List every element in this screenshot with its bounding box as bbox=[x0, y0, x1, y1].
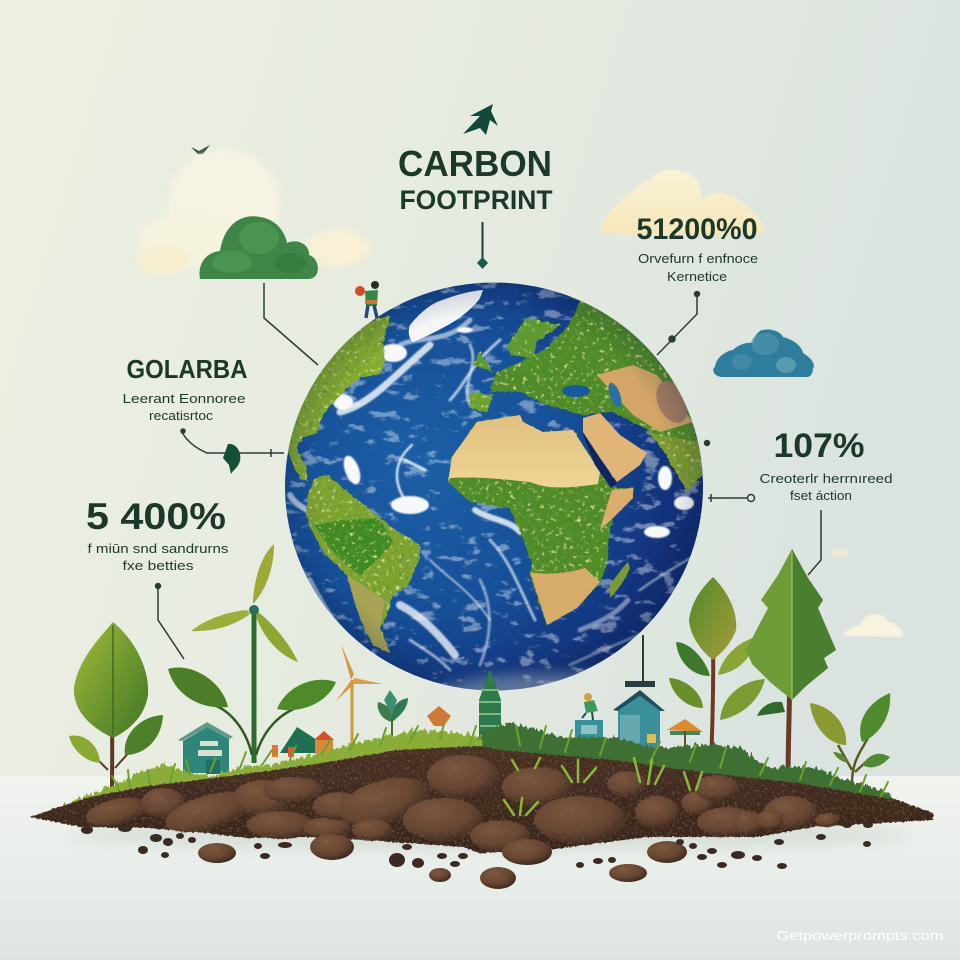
connector: right stat to globe bbox=[704, 440, 821, 575]
stat: right: fset áction bbox=[790, 488, 852, 503]
soil mound bbox=[30, 746, 933, 853]
north america bbox=[287, 315, 390, 482]
andes and pampas bbox=[347, 575, 390, 653]
scandinavia bbox=[507, 318, 560, 358]
africa south bbox=[530, 568, 600, 625]
stat: top right bbox=[636, 213, 758, 284]
limb shading bbox=[285, 282, 703, 690]
himalaya bbox=[656, 381, 688, 423]
stat: right: 107% bbox=[774, 427, 864, 465]
cloud: small cream right bbox=[832, 549, 903, 637]
stat: right: Creoterlr herrnıreed bbox=[760, 471, 892, 486]
stat: right bbox=[760, 427, 892, 503]
icon: bird bbox=[191, 145, 210, 154]
caspian sea bbox=[608, 382, 622, 408]
connector: lower left stat bbox=[156, 584, 184, 659]
stat: lower left: f miūn snd sandrurns bbox=[88, 541, 229, 556]
wind turbine with leaf blades bbox=[168, 544, 336, 763]
stat: top right: 51200%0 bbox=[636, 213, 758, 246]
amazon core bbox=[315, 518, 393, 575]
grass band left bbox=[50, 730, 480, 818]
stat: left heading bbox=[122, 354, 248, 423]
cloud texture bbox=[285, 282, 705, 692]
soil lumps bbox=[83, 755, 839, 852]
britain bbox=[473, 352, 493, 372]
connector: left heading to globe bbox=[181, 429, 284, 457]
icon: tree logo bbox=[463, 104, 498, 135]
sprout: far right bbox=[810, 693, 890, 783]
cloud: large cream cloud top left bbox=[137, 150, 369, 274]
arabia bbox=[583, 413, 647, 482]
globe bbox=[285, 282, 705, 726]
black sea bbox=[562, 385, 590, 397]
tree: right pair bbox=[669, 549, 836, 782]
africa sahara bbox=[448, 415, 600, 488]
small sprout and central tower bbox=[378, 669, 598, 742]
cloud: cream cloud top right bbox=[600, 169, 765, 235]
small soil crumbs bbox=[81, 822, 873, 869]
stat: lower left: 5 400% bbox=[86, 496, 226, 537]
stat: lower left bbox=[86, 496, 229, 573]
white cloud patches bbox=[333, 327, 694, 538]
connector: top right stat to globe bbox=[657, 292, 700, 355]
madagascar bbox=[610, 562, 630, 598]
cloud: green textured cloud bbox=[200, 216, 318, 279]
title bbox=[398, 143, 553, 215]
stat: top right: Orvefurn f enfnoce bbox=[638, 251, 758, 266]
arrow: title to globe bbox=[477, 222, 488, 269]
ice cap bbox=[409, 290, 483, 342]
stat: top right: Kernetice bbox=[667, 269, 727, 284]
tree: left leaf bbox=[69, 622, 163, 793]
connector: top left cloud to globe bbox=[264, 283, 318, 365]
figure on top of globe bbox=[355, 281, 379, 318]
red sea bbox=[582, 432, 617, 488]
horn of africa bbox=[600, 488, 633, 530]
south america bbox=[306, 475, 420, 653]
small wind turbine bbox=[336, 644, 383, 745]
stat: lower left: fxe betties bbox=[122, 558, 194, 573]
soil clods bbox=[198, 834, 687, 889]
india bbox=[648, 432, 703, 492]
central asia desert bbox=[597, 365, 693, 432]
grass band right bbox=[480, 723, 905, 812]
stat: left heading: GOLARBA bbox=[126, 354, 248, 384]
bottom rim haze bbox=[438, 666, 590, 690]
icon: leaf marker bbox=[223, 444, 240, 474]
houses bbox=[178, 635, 703, 774]
title: FOOTPRINT bbox=[400, 185, 553, 215]
ground shadow bbox=[70, 819, 910, 851]
africa green base bbox=[448, 415, 633, 625]
title: CARBON bbox=[398, 143, 552, 184]
eurasia bbox=[490, 295, 703, 492]
cloud: blue cloud right bbox=[713, 329, 814, 377]
grass tufts bbox=[112, 724, 888, 798]
stat: left heading: recatisrtoc bbox=[149, 408, 214, 423]
stat: left heading: Leerant Eonnoree bbox=[122, 391, 246, 406]
ocean swirls bbox=[290, 320, 695, 670]
watermark: Getpowerprompts.com bbox=[776, 928, 944, 943]
grass on mound bbox=[504, 758, 702, 815]
iberia bbox=[470, 392, 493, 412]
